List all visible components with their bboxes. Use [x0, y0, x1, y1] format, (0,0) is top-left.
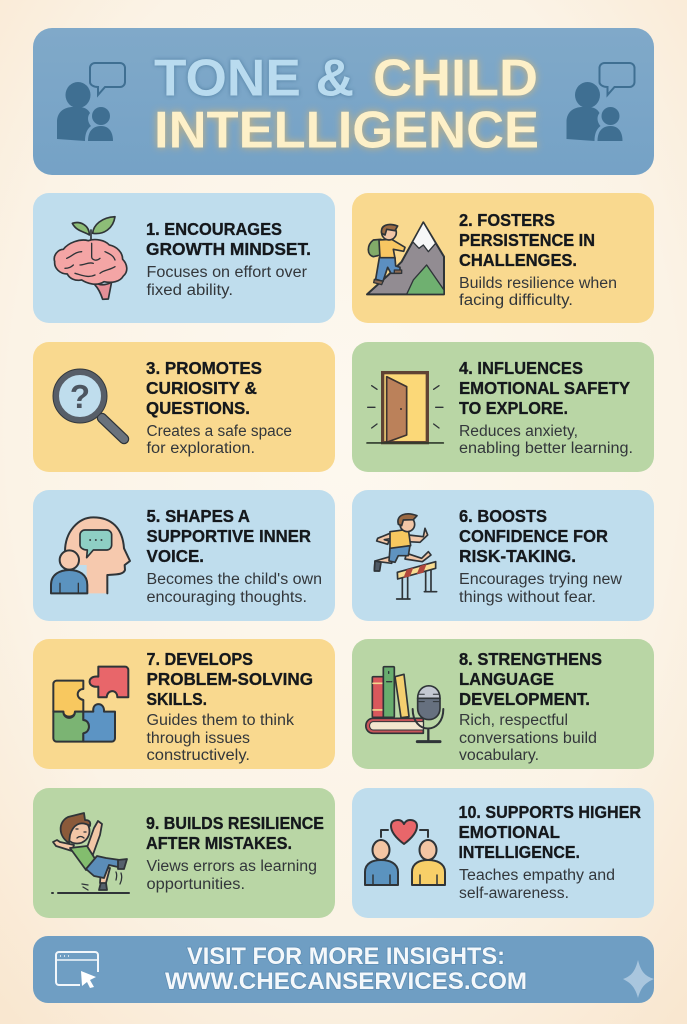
text: card 7: 7. DEVELOPS	[146, 649, 253, 669]
text: card 10: Teaches empathy and	[459, 867, 615, 884]
title: TONE &	[154, 50, 354, 108]
text: card 3: QUESTIONS.	[146, 398, 250, 418]
text: card 9	[146, 813, 324, 893]
icon: sparkle	[623, 960, 654, 998]
title	[154, 50, 539, 160]
text: card 9: opportunities.	[146, 876, 245, 893]
text: card 8: conversations build	[459, 730, 597, 747]
text: card 3	[146, 358, 292, 457]
panel: 7 problem solving	[33, 639, 335, 769]
icon: magnifying glass with question mark	[53, 369, 124, 439]
text: card 8: DEVELOPMENT.	[459, 689, 590, 709]
text: card 7	[146, 649, 313, 764]
text: card 1: fixed ability.	[146, 282, 233, 299]
text: card 4: 4. INFLUENCES	[459, 358, 583, 378]
icon: puzzle pieces	[53, 667, 128, 742]
panel: 2 persistence	[352, 193, 654, 323]
text: card 8: Rich, respectful	[459, 712, 568, 729]
text: card 2: CHALLENGES.	[459, 250, 577, 270]
text: card 4: TO EXPLORE.	[459, 398, 568, 418]
panel: 3 curiosity	[33, 342, 335, 472]
icon: parent and child with speech bubble (left)	[57, 63, 125, 141]
icon: parent and child with speech bubble (right)	[566, 63, 634, 141]
title: CHILD	[373, 50, 538, 108]
text: card 5: encouraging thoughts.	[146, 589, 307, 606]
text: card 2: PERSISTENCE IN	[459, 230, 595, 250]
text: card 7: through issues	[146, 730, 250, 747]
icon: open door with rays	[367, 373, 443, 443]
text: card 10: 10. SUPPORTS HIGHER	[458, 802, 641, 822]
icon: browser window with cursor	[56, 952, 98, 988]
panel: 6 confidence	[352, 490, 654, 621]
icon: two people with heart	[365, 820, 445, 885]
text: card 4	[459, 358, 633, 457]
text: card 2: Builds resilience when	[459, 275, 617, 292]
text: card 7: PROBLEM-SOLVING	[146, 669, 313, 689]
text: card 6: RISK-TAKING.	[459, 546, 576, 566]
header banner	[33, 28, 654, 175]
panel: 1 growth mindset	[33, 193, 335, 323]
icon: child tripping	[52, 813, 129, 893]
panel: 10 emotional intelligence	[352, 788, 654, 918]
text: card 2: 2. FOSTERS	[459, 210, 555, 230]
text: card 1	[146, 219, 311, 299]
icon: brain with sprout	[54, 217, 127, 299]
title: CHILD	[373, 50, 538, 108]
text: card 1: 1. ENCOURAGES	[146, 219, 282, 239]
text: card 8: LANGUAGE	[459, 669, 554, 689]
title: INTELLIGENCE	[154, 102, 539, 160]
text: card 8: 8. STRENGTHENS	[459, 649, 602, 669]
text: card 5: SUPPORTIVE INNER	[146, 526, 311, 546]
title: INTELLIGENCE	[154, 102, 539, 160]
text: card 6: CONFIDENCE FOR	[459, 526, 608, 546]
footer text	[165, 943, 527, 995]
text: card 7: Guides them to think	[146, 712, 294, 729]
text: card 2: facing difficulty.	[459, 292, 573, 309]
text: card 3: 3. PROMOTES	[146, 358, 262, 378]
text: card 7: constructively.	[146, 747, 250, 764]
text: card 5: Becomes the child's own	[146, 571, 322, 588]
text: card 10: self-awareness.	[459, 885, 569, 902]
icon: books and microphone	[366, 667, 443, 742]
text: card 9: 9. BUILDS RESILIENCE	[146, 813, 324, 833]
text: card 8	[459, 649, 602, 764]
footer text: VISIT FOR MORE INSIGHTS:	[187, 943, 505, 970]
text: card 7: SKILLS.	[146, 689, 207, 709]
text: card 6: things without fear.	[459, 589, 596, 606]
text: card 4: Reduces anxiety,	[459, 423, 578, 440]
icon: climber on mountain	[367, 222, 444, 294]
text: card 10	[458, 802, 641, 902]
title: TONE &	[154, 50, 354, 108]
text: card 5: 5. SHAPES A	[146, 506, 250, 526]
icon: child jumping hurdle	[374, 514, 437, 599]
text: card 3: for exploration.	[146, 440, 255, 457]
text: card 4: enabling better learning.	[459, 440, 633, 457]
text: card 9: AFTER MISTAKES.	[146, 833, 292, 853]
footer text: WWW.CHECANSERVICES.COM	[165, 968, 527, 995]
text: card 4: EMOTIONAL SAFETY	[459, 378, 630, 398]
text: card 6: 6. BOOSTS	[459, 506, 547, 526]
text: card 3: CURIOSITY &	[146, 378, 257, 398]
text: card 1: GROWTH MINDSET.	[146, 239, 311, 259]
text: card 8: vocabulary.	[459, 747, 539, 764]
icon: head with speech bubble and person	[51, 517, 130, 593]
text: card 3: Creates a safe space	[146, 423, 292, 440]
text: card 10: EMOTIONAL	[458, 822, 560, 842]
text: card 6: Encourages trying new	[459, 571, 623, 588]
text: card 2	[459, 210, 617, 309]
text: card 1: Focuses on effort over	[146, 264, 307, 281]
text: card 6	[459, 506, 623, 606]
icon: magnifying glass with question mark: ?	[70, 378, 90, 415]
panel: 5 inner voice	[33, 490, 335, 621]
panel: 9 resilience	[33, 788, 335, 918]
text: card 10: INTELLIGENCE.	[458, 842, 580, 862]
footer banner	[33, 936, 654, 1003]
panel: 4 emotional safety	[352, 342, 654, 472]
text: card 9: Views errors as learning	[146, 858, 317, 875]
text: card 5: VOICE.	[146, 546, 204, 566]
text: card 5	[146, 506, 322, 606]
panel: 8 language	[352, 639, 654, 769]
